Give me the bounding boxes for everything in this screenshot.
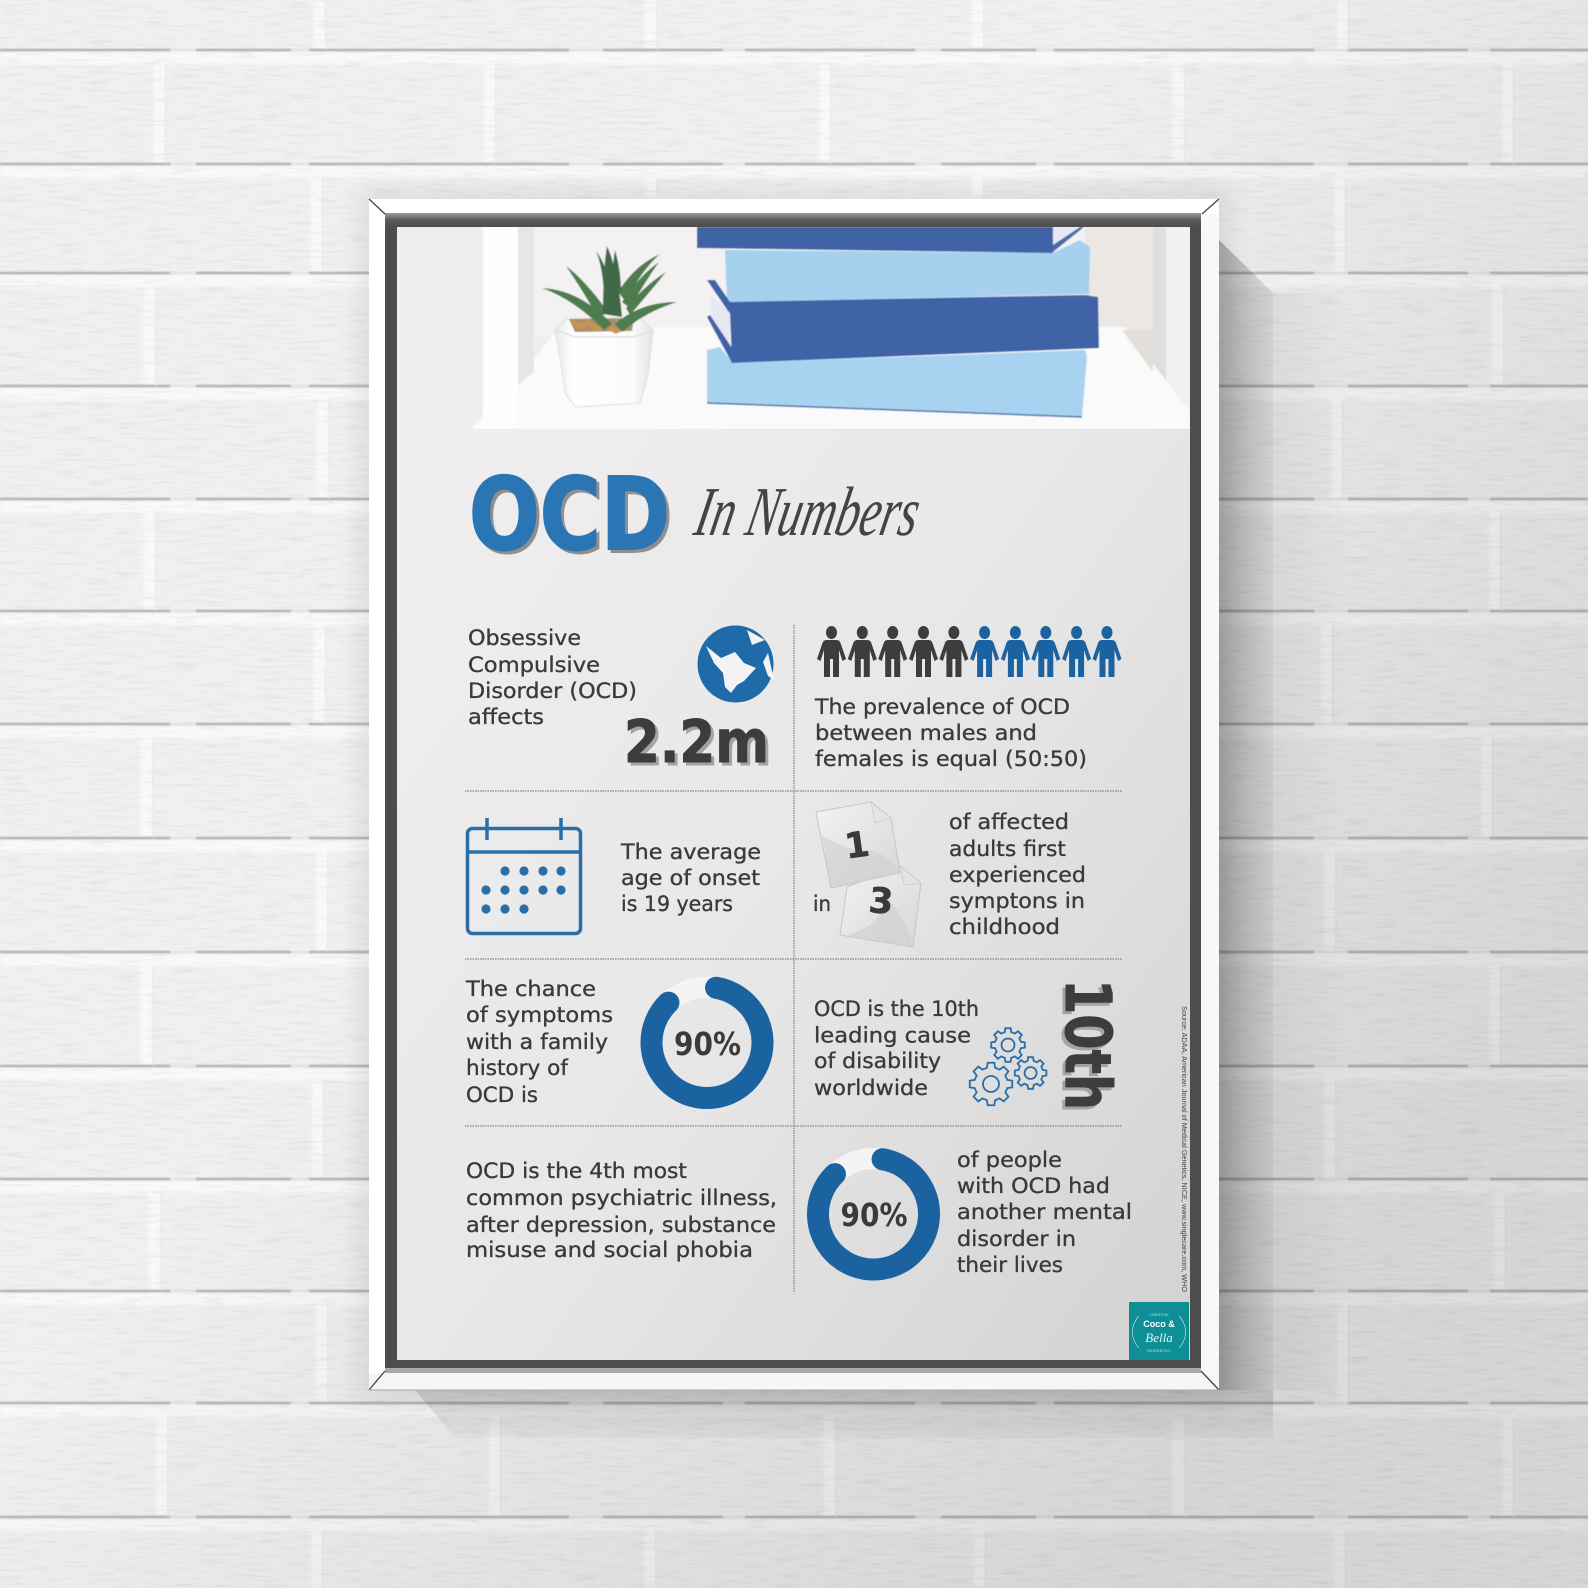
text: affected adults: experienced <box>949 863 1086 888</box>
text: people with OCD: disorder in <box>957 1227 1076 1252</box>
text: chance of symptoms: The chance <box>465 977 596 1002</box>
poster paper <box>397 227 1190 1360</box>
text: leading cause: worldwide <box>814 1076 928 1101</box>
panel: 4th most common: after depression, substance <box>466 1213 776 1238</box>
text: obsessive compulsive disorder <box>468 626 637 730</box>
text: chance of symptoms: with a family <box>466 1030 608 1055</box>
icon: paper sheet with 3: 3 <box>867 881 895 923</box>
text: chance of symptoms: OCD is <box>466 1083 538 1108</box>
text: obsessive compulsive disorder: Compulsive <box>468 653 600 678</box>
text: prevalence: females is equal (50:50) <box>815 747 1087 772</box>
text: in: in <box>813 892 831 917</box>
panel: 4th most common: OCD is the 4th most <box>466 1159 687 1184</box>
source note: Source: ADAA, American Journal of Medical Genetics, NICE, www.singlecare.com, WHO <box>1180 1006 1189 1292</box>
chart: donut 90%: 90% <box>674 1025 741 1063</box>
chart: donut 90% <box>818 1158 929 1270</box>
text: people with OCD <box>957 1148 1132 1278</box>
panel: 4th most common: misuse and social phobia <box>466 1238 753 1263</box>
text: average age: age of onset <box>621 866 760 891</box>
text: average age: is 19 years <box>621 892 733 917</box>
text: prevalence: between males and <box>815 721 1037 746</box>
text: people with OCD: another mental <box>957 1200 1132 1225</box>
white picture frame <box>369 199 1219 1390</box>
text: prevalence <box>814 695 1087 772</box>
panel: another mental disorder <box>818 1148 1132 1278</box>
text: leading cause: OCD is the 10th <box>814 997 979 1022</box>
logo: Coco and Bella: Coco & <box>1143 1319 1175 1329</box>
text: chance of symptoms: history of <box>466 1056 568 1081</box>
stat: 2.2m: 2.2m <box>624 707 769 776</box>
panel: 10th leading cause <box>814 979 1124 1110</box>
photo: plant and stacked blue books <box>397 227 1190 429</box>
panel: age of onset <box>467 818 761 934</box>
text: obsessive compulsive disorder: Disorder (OCD) <box>468 679 637 704</box>
text: leading cause: of disability <box>814 1049 941 1074</box>
text: average age: The average <box>620 840 761 865</box>
chart: donut 90% <box>652 987 763 1098</box>
text: obsessive compulsive disorder: affects <box>468 705 544 730</box>
icon: globe <box>698 626 774 702</box>
text: chance of symptoms: of symptoms <box>466 1003 613 1028</box>
icon: paper sheet with 1 <box>816 802 900 888</box>
grid dividers <box>465 625 1122 1292</box>
text: leading cause: leading cause <box>814 1024 971 1049</box>
icon: paper sheet with 3 <box>840 866 921 947</box>
text: prevalence: The prevalence of OCD <box>814 695 1070 720</box>
title script: In Numbers: In Numbers <box>688 474 927 551</box>
text: average age <box>620 840 761 917</box>
panel: 4th most common: common psychiatric illness, <box>466 1186 777 1211</box>
photo background wall and shelf <box>397 227 1190 429</box>
icon: gears <box>970 1028 1046 1105</box>
text: people with OCD: of people <box>957 1148 1062 1173</box>
panel: 4th most common <box>466 1159 777 1263</box>
stat: 10th rotated: 10th <box>1051 979 1124 1110</box>
icon row: ten people <box>817 626 1122 677</box>
panel: male female prevalence <box>814 626 1122 772</box>
panel: family history <box>465 977 763 1108</box>
logo: Coco and Bella: DESIGN CO. <box>1147 1348 1171 1353</box>
text: affected adults: symptons in <box>949 889 1085 914</box>
icon: calendar <box>467 818 581 934</box>
chart: donut 90%: 90% <box>840 1196 908 1234</box>
text: people with OCD: their lives <box>957 1253 1063 1278</box>
title word: OCD: OCD <box>469 456 670 573</box>
text: affected adults: of affected <box>949 810 1069 835</box>
icon: paper sheet with 1: 1 <box>842 824 872 867</box>
stack of books <box>697 227 1099 417</box>
text: affected adults: childhood <box>949 915 1060 940</box>
logo: Coco and Bella: Bella <box>1145 1330 1173 1345</box>
logo: Coco and Bella: CREATIVE <box>1149 1312 1169 1317</box>
text: affected adults: adults first <box>949 837 1066 862</box>
text: obsessive compulsive disorder: Obsessive <box>468 626 581 651</box>
text: chance of symptoms <box>465 977 613 1108</box>
text: people with OCD: with OCD had <box>957 1174 1110 1199</box>
logo: Coco and Bella <box>1129 1302 1189 1360</box>
potted succulent <box>542 246 677 407</box>
title <box>469 456 927 573</box>
text: affected adults <box>949 810 1086 940</box>
panel: 2.2m affected <box>468 626 774 776</box>
panel: 1 in 3 <box>813 802 1086 947</box>
text: leading cause <box>814 997 979 1101</box>
